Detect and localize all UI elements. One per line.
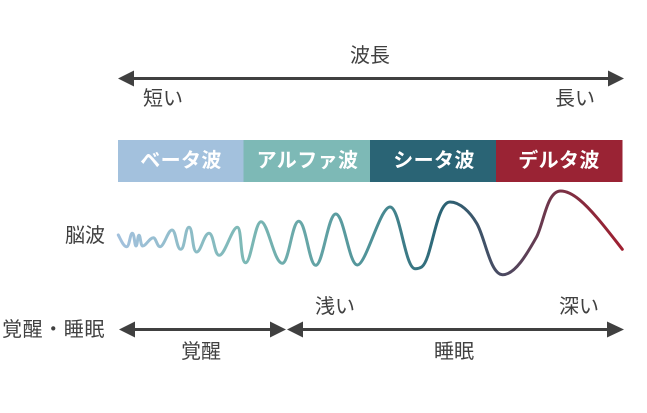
band: beta xyxy=(118,140,244,182)
label: wakefulness: 覚醒 xyxy=(181,340,221,363)
label: long: 長い xyxy=(555,88,595,110)
chart: brain wave curve xyxy=(118,191,622,275)
band: alpha: アルファ波 xyxy=(257,149,358,172)
band: theta: シータ波 xyxy=(393,149,475,172)
label: sleep: 睡眠 xyxy=(434,340,474,363)
label: short: 短い xyxy=(143,87,183,110)
label: wake and sleep: 覚醒・睡眠 xyxy=(2,318,105,341)
label: brain waves: 脳波 xyxy=(65,224,105,247)
band: delta xyxy=(496,140,622,182)
band: theta xyxy=(370,140,496,182)
label: deep: 深い xyxy=(559,295,599,318)
arrow: wakefulness xyxy=(119,322,286,338)
band: beta: ベータ波 xyxy=(140,149,222,172)
heading: wavelength: 波長 xyxy=(350,44,390,67)
band: alpha xyxy=(244,140,370,182)
arrow: sleep xyxy=(287,322,624,338)
label: shallow: 浅い xyxy=(315,295,355,318)
band: delta: デルタ波 xyxy=(518,148,600,172)
band: wave types xyxy=(118,140,622,182)
arrow: wavelength xyxy=(118,70,624,86)
